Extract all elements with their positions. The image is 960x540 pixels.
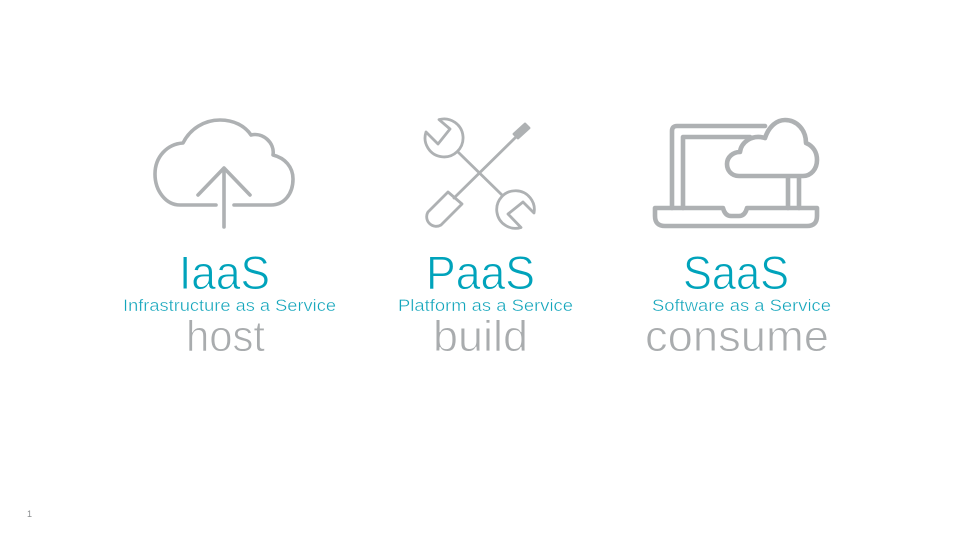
heading: PaaS: PaaS xyxy=(426,246,535,299)
text: host: host xyxy=(186,312,265,361)
text: Platform as a Service: Platform as a Service xyxy=(398,296,573,315)
text: build: build xyxy=(433,312,528,361)
icon: crossed wrench and screwdriver xyxy=(425,119,534,228)
icon: laptop with cloud xyxy=(655,120,817,226)
heading: IaaS: IaaS xyxy=(179,246,270,299)
text: Software as a Service: Software as a Service xyxy=(652,296,831,315)
page number: 1 xyxy=(27,509,32,519)
text: consume: consume xyxy=(645,312,829,361)
panel: IaaS column xyxy=(123,120,336,361)
panel: PaaS column xyxy=(398,119,573,361)
icon: cloud with upload arrow xyxy=(155,120,293,227)
heading: SaaS: SaaS xyxy=(683,246,789,299)
panel: SaaS column xyxy=(645,120,831,361)
text: Infrastructure as a Service: Infrastructure as a Service xyxy=(123,296,336,315)
